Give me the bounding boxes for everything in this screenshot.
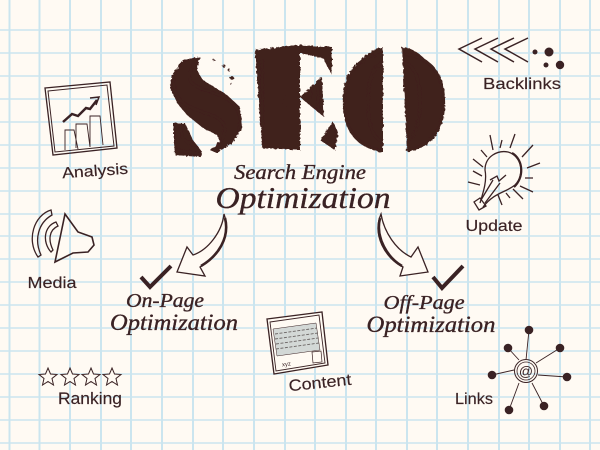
label: Content: Content xyxy=(288,372,353,395)
icon: media megaphone xyxy=(32,210,94,262)
icon: content page xyxy=(267,312,328,374)
icon: content page: xyz xyxy=(282,361,291,369)
label: On-Page Optimization: Optimization xyxy=(110,310,238,335)
subtitle: Optimization: Optimization xyxy=(216,180,390,215)
label: Off-Page Optimization xyxy=(366,292,496,337)
arrow: to on-page xyxy=(177,214,226,276)
SEO stencil title: S xyxy=(165,22,247,184)
icon: links network xyxy=(488,326,571,414)
icon: light bulb xyxy=(468,134,540,210)
label: Update: Update xyxy=(466,218,523,235)
label: Off-Page Optimization: Off-Page xyxy=(384,292,465,314)
check mark left xyxy=(141,266,171,287)
icon: backlinks arrows and dots xyxy=(459,38,564,69)
label: Media: Media xyxy=(28,275,77,292)
icon: ranking stars xyxy=(39,368,121,385)
icon: links network: @ xyxy=(519,363,533,379)
icon: analysis chart xyxy=(45,82,117,155)
check mark right xyxy=(433,266,463,288)
label: On-Page Optimization: On-Page xyxy=(126,290,204,312)
SEO stencil title: O xyxy=(337,20,451,182)
label: Backlinks: Backlinks xyxy=(483,76,561,93)
label: Ranking: Ranking xyxy=(58,389,122,408)
label: Off-Page Optimization: Optimization xyxy=(366,312,496,337)
SEO stencil title: E xyxy=(247,20,345,182)
arrow: to off-page xyxy=(378,214,428,276)
label: Analysis: Analysis xyxy=(62,161,129,182)
label: On-Page Optimization xyxy=(110,290,238,335)
subtitle: Search Engine: Search Engine xyxy=(234,160,366,184)
SEO stencil title xyxy=(170,44,446,158)
label: Links: Links xyxy=(455,391,493,408)
